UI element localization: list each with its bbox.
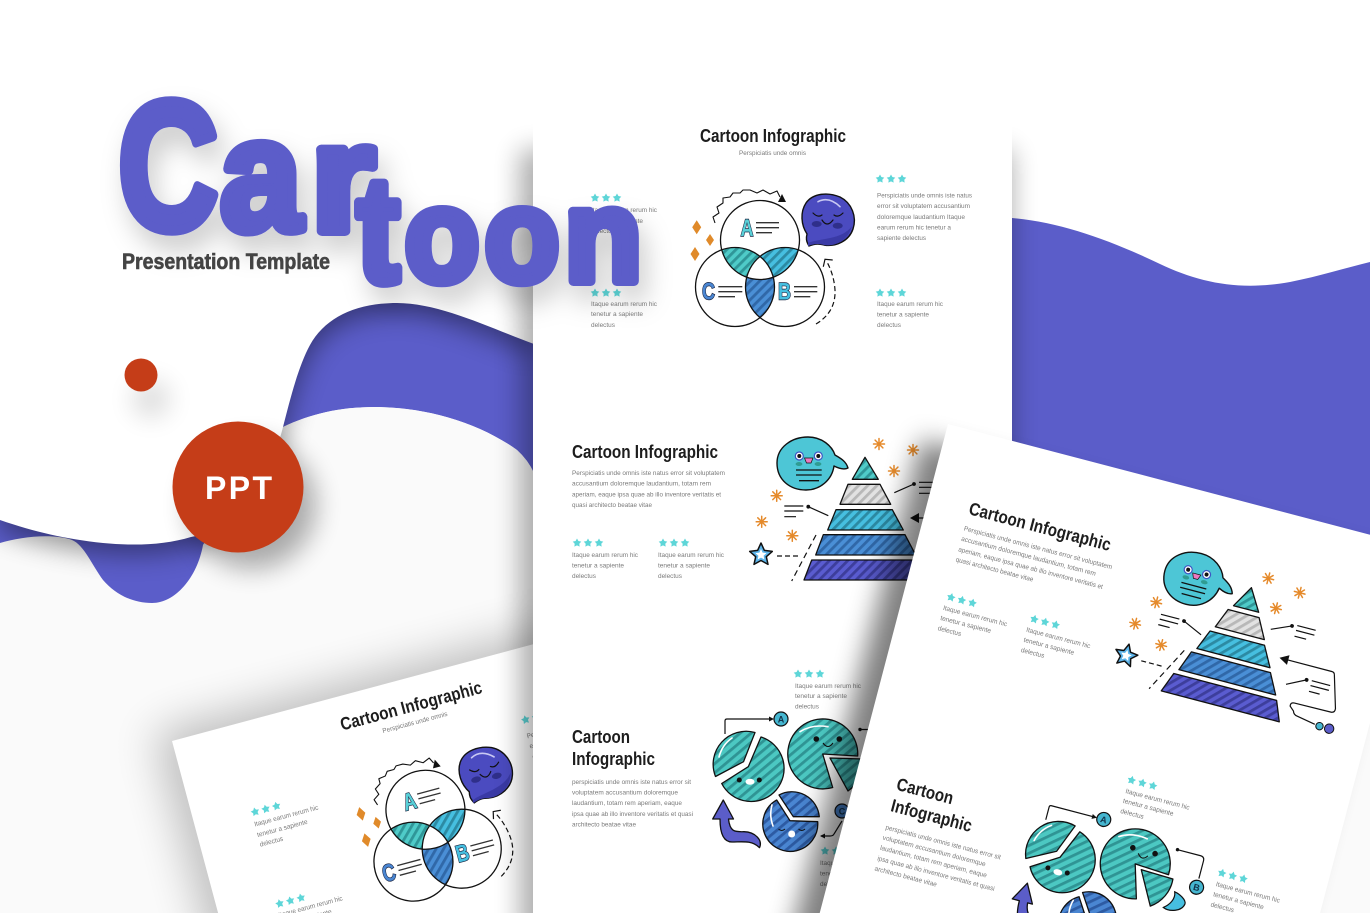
text block: left upper: Itaque earum rerum hic — [254, 804, 320, 828]
body: section 3 — [572, 779, 693, 828]
pie charts — [713, 712, 888, 851]
text block: section 3 bottom: delectus — [820, 881, 845, 888]
text block: section 3 top — [1118, 775, 1194, 832]
text block: section 2 right — [658, 538, 725, 580]
text block: section 3 top: tenetur a sapiente — [1122, 798, 1174, 818]
body: section 3: architecto beatae vitae — [874, 866, 938, 889]
body: section 3: ipsa quae ab illo inventore veritatis et quasi — [572, 811, 693, 818]
title: Cartoon: o — [485, 162, 559, 309]
heading: section 3 — [889, 774, 980, 836]
text block: right lower — [876, 288, 944, 329]
panel: tilted slide right — [718, 418, 1370, 913]
text block: section 2 right: Itaque earum rerum hic — [1025, 627, 1092, 650]
heading: section 3 — [572, 727, 655, 769]
body: section 3: laudantium, totam rem aperiam, eaque — [572, 800, 682, 807]
body: section 3: voluptatem accusantium doloremque — [572, 790, 678, 796]
title: Cartoon: n — [564, 163, 642, 309]
pie charts — [1004, 795, 1216, 913]
heading: section 1: Cartoon Infographic — [700, 126, 846, 146]
text block: section 3 top: Itaque earum rerum hic — [795, 683, 862, 690]
text block: section 3 right: tenetur a sapiente — [1212, 891, 1265, 911]
heading: section 3: Cartoon — [572, 727, 630, 747]
text block: right upper: doloremque laudantium Itaque — [532, 732, 619, 761]
title: Cartoon — [118, 65, 642, 314]
text block: section 2 left: Itaque earum rerum hic — [942, 605, 1008, 629]
panel: tilted slide bottom left — [154, 605, 764, 913]
subtitle: Presentation Template: Presentation Template — [122, 249, 330, 274]
heading: Cartoon Infographic — [338, 677, 484, 734]
text block: right upper: Perspiciatis unde omnis iste natus — [526, 709, 620, 740]
text block: left lower: Itaque earum rerum hic — [591, 301, 658, 308]
body: section 3 — [874, 824, 1004, 903]
venn diagram — [690, 190, 854, 326]
venn diagram: C — [380, 859, 399, 888]
title: Cartoon: a — [220, 85, 303, 264]
title: Cartoon: o — [405, 162, 479, 309]
heading: section 3: Cartoon — [894, 774, 956, 808]
heading: section 3: Infographic — [572, 749, 655, 769]
text block: section 2 left: delectus — [937, 625, 962, 638]
text block: right lower: delectus — [877, 322, 902, 329]
text block: right upper: sapiente delectus — [877, 235, 927, 242]
lower pale ground — [0, 540, 1370, 913]
text block: section 3 right: Itaque earum rerum hic — [1215, 881, 1281, 905]
text block: section 2 left: tenetur a sapiente — [572, 562, 624, 570]
body: section 2: accusantium doloremque laudantium, totam rem — [960, 536, 1097, 578]
shadow of main slide — [520, 150, 1012, 913]
text block: left upper: tenetur a sapiente — [256, 819, 309, 839]
pyramid chart — [1108, 539, 1368, 737]
pyramid chart — [750, 437, 981, 581]
body: section 2: Perspiciatis unde omnis iste natus error sit voluptatem — [963, 526, 1113, 571]
body: section 2: quasi architecto beatae vitae — [955, 557, 1034, 584]
pie charts: A — [778, 714, 785, 724]
text block: left lower — [274, 883, 350, 913]
purple wave: left band and blob — [0, 300, 534, 603]
venn diagram — [345, 737, 539, 911]
title: Cartoon: C — [118, 65, 218, 268]
subheading: section 1: Perspiciatis unde omnis — [739, 150, 807, 157]
body: section 2: quasi architecto beatae vitae — [572, 502, 652, 509]
text block: section 2 left — [572, 538, 639, 580]
text block: section 3 top: delectus — [795, 704, 820, 710]
body: section 2: aperiam, eaque ipsa quae ab illo inventore veritatis et — [572, 492, 721, 498]
text block: section 2 right — [1020, 614, 1095, 671]
body: section 3: perspiciatis unde omnis iste natus error sit — [572, 779, 691, 786]
body: section 2: aperiam, eaque ipsa quae ab illo inventore veritatis et — [958, 546, 1104, 591]
body: section 2 — [572, 470, 725, 509]
text block: section 3 bottom — [820, 846, 887, 888]
text block: section 3 right — [1208, 868, 1285, 913]
text block: right upper: error sit voluptatem accusantium — [877, 203, 970, 210]
text block: right upper — [876, 174, 973, 242]
text block: section 3 bottom: Itaque earum rerum hic — [820, 860, 887, 867]
text block: left upper: delectus — [591, 228, 616, 235]
venn diagram: C — [702, 279, 715, 305]
venn diagram: A — [400, 788, 420, 816]
body: section 3: voluptatem accusantium doloremque — [882, 835, 986, 868]
white top shape — [0, 0, 534, 545]
text block: section 2 left: tenetur a sapiente — [940, 615, 992, 635]
text block: right upper — [520, 691, 626, 761]
body: section 3: perspiciatis unde omnis iste natus error sit — [885, 824, 1002, 861]
heading: section 2: Cartoon Infographic — [572, 442, 718, 462]
title: Cartoon: t — [357, 145, 400, 314]
text block: section 2 right: delectus — [658, 573, 683, 580]
text block: right upper: error sit voluptatem accusantium — [529, 720, 621, 750]
body: section 2 — [955, 526, 1113, 602]
venn diagram: B — [453, 840, 472, 868]
text block: left upper — [591, 194, 658, 235]
text block: section 3 top: delectus — [1119, 808, 1145, 821]
text block: section 2 right: Itaque earum rerum hic — [658, 552, 725, 559]
body: section 3: laudantium, totam rem aperiam, eaque — [879, 845, 988, 880]
text block: section 2 left: delectus — [572, 573, 597, 580]
body: section 2: Perspiciatis unde omnis iste natus error sit voluptatem — [572, 470, 725, 477]
title: Cartoon: r — [310, 92, 375, 264]
text block: section 2 left: Itaque earum rerum hic — [572, 552, 639, 559]
text block: section 3 top: tenetur a sapiente — [795, 693, 847, 700]
pie charts: B — [1192, 882, 1201, 893]
text block: right upper: doloremque laudantium Itaque — [877, 214, 965, 221]
text block: section 3 top: Itaque earum rerum hic — [1125, 788, 1191, 812]
pie charts: C — [839, 806, 846, 816]
top white background band — [0, 0, 1370, 540]
text block: section 2 right: tenetur a sapiente — [1023, 637, 1075, 657]
text block: right upper: earum rerum hic tenetur a — [877, 224, 951, 232]
text block: right lower: tenetur a sapiente — [877, 312, 929, 318]
text block: section 2 right: delectus — [1020, 647, 1046, 660]
text block: left lower — [591, 288, 658, 329]
text block: left lower: tenetur a sapiente — [591, 311, 643, 318]
venn diagram: A — [740, 216, 753, 242]
PPT badge: PPT — [205, 470, 272, 506]
text block: section 3 bottom: tenetur a sapiente — [820, 870, 872, 878]
text block: left lower: delectus — [591, 322, 616, 329]
text block: right upper: Perspiciatis unde omnis iste natus — [877, 192, 973, 200]
text block: section 2 right: tenetur a sapiente — [658, 562, 710, 570]
pale area beneath purple band — [203, 407, 534, 620]
text block: section 3 top — [794, 670, 862, 710]
heading: section 3: Infographic — [889, 795, 974, 836]
body: section 2: accusantium doloremque laudantium, totam rem — [572, 480, 711, 488]
text block: left upper: tenetur a sapiente — [591, 218, 643, 225]
text block: left upper: Itaque earum rerum hic — [591, 207, 658, 214]
small red dot — [124, 358, 169, 417]
text block: left upper — [250, 791, 325, 849]
text block: right lower: Itaque earum rerum hic — [877, 301, 944, 308]
body: section 3: architecto beatae vitae — [572, 822, 636, 828]
text block: section 2 left — [937, 592, 1012, 649]
purple wave: right — [1012, 218, 1370, 600]
text block: left upper: delectus — [259, 836, 285, 849]
pie charts: A — [1099, 814, 1109, 826]
venn diagram: B — [778, 279, 791, 305]
panel: main slide — [533, 108, 1012, 913]
body: section 3: ipsa quae ab illo inventore veritatis et quasi — [876, 855, 996, 893]
subheading: Perspiciatis unde omnis — [382, 711, 449, 735]
shadow of the white top shape — [0, 303, 533, 570]
heading: section 2: Cartoon Infographic — [967, 498, 1113, 555]
PPT badge — [172, 422, 316, 569]
